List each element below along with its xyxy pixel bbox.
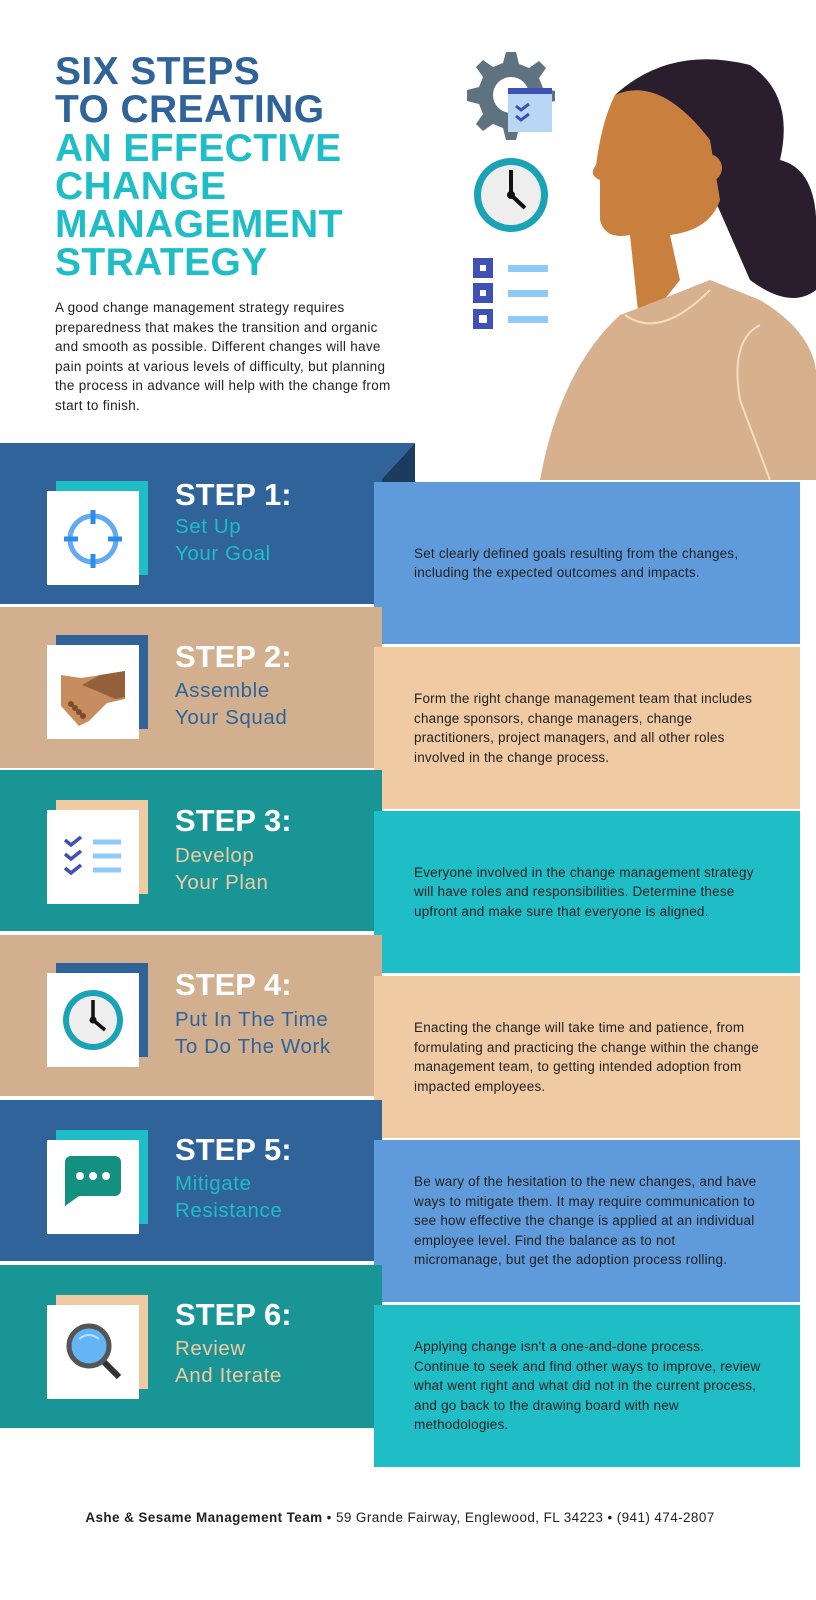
subtitle: To Do The Work: [175, 1035, 331, 1058]
subtitle: And Iterate: [175, 1364, 282, 1387]
heading: step 2: STEP 2:: [175, 639, 292, 674]
text: step 3: [374, 811, 800, 973]
footer: Ashe & Sesame Management Team • 59 Grande Fairway, Englewood, FL 34223 • (941) 474-2807: [85, 1510, 715, 1525]
subtitle: Assemble: [175, 679, 270, 702]
text: step 2: Form the right change management team that includes change sponsors, change managers, change practitioners, project managers, and all other roles involved in the change process.: [414, 691, 752, 764]
text: step 1: [374, 482, 800, 644]
icon: target: [47, 481, 148, 585]
heading: step 1: STEP 1:: [175, 477, 292, 512]
icon: clock: [474, 158, 548, 232]
title: [55, 50, 343, 284]
subtitle: [175, 844, 269, 894]
panel: step 2: [0, 607, 382, 768]
illustration: woman and icons: [467, 52, 816, 480]
title: MANAGEMENT: [55, 203, 343, 246]
text: step 1: Set clearly defined goals resulting from the changes, including the expected outcomes and impacts.: [414, 546, 738, 580]
subtitle: Review: [175, 1337, 246, 1360]
text: step 3: Everyone involved in the change management strategy will have roles and responsibilities. Determine these upfront and make sure that everyone is aligned.: [414, 865, 754, 919]
icon: checklist: [47, 800, 148, 904]
heading: step 4: STEP 4:: [175, 967, 292, 1002]
subtitle: [175, 679, 287, 729]
title: TO CREATING: [55, 88, 324, 131]
text: step 4: [374, 976, 800, 1138]
heading: step 6: STEP 6:: [175, 1297, 292, 1332]
text: step 2: [374, 647, 800, 809]
text: step 6: Applying change isn't a one-and-done process. Continue to seek and find other ways to improve, review what went right and what did not in the current process, and go back to the drawing board with new methodologies.: [414, 1339, 760, 1432]
text: step 5: Be wary of the hesitation to the new changes, and have ways to mitigate them. It may require communication to see how effective the change is applied at an individual employee level. Find the balance as to not micromanage, but get the adoption process rolling.: [414, 1174, 757, 1267]
icon: clock: [47, 963, 148, 1067]
icon: gear with checklist: [467, 52, 555, 140]
heading: step 5: STEP 5:: [175, 1132, 292, 1167]
panel: step 5: [0, 1100, 382, 1261]
icon: chat bubble: [47, 1130, 148, 1234]
panel: step 6: [0, 1265, 382, 1428]
text: step 5: [374, 1140, 800, 1302]
title: STRATEGY: [55, 241, 268, 284]
subtitle: Your Goal: [175, 542, 271, 565]
text: step 6: [374, 1305, 800, 1467]
subtitle: [175, 1337, 282, 1387]
panel: step 4: [0, 935, 382, 1096]
title: CHANGE: [55, 165, 226, 208]
panel: step 1: [0, 443, 382, 604]
title: AN EFFECTIVE: [55, 127, 341, 170]
subtitle: Develop: [175, 844, 254, 867]
subtitle: Your Plan: [175, 871, 269, 894]
heading: step 3: STEP 3:: [175, 803, 292, 838]
subtitle: [175, 1172, 282, 1222]
icon: magnifier: [47, 1295, 148, 1399]
icon: handshake: [47, 635, 148, 739]
icon: checklist: [473, 258, 548, 329]
subtitle: Your Squad: [175, 706, 287, 729]
subtitle: Put In The Time: [175, 1008, 328, 1031]
step 1 fold triangle: [382, 443, 415, 482]
woman: [540, 59, 816, 480]
intro text: A good change management strategy requires preparedness that makes the transition and organic and smooth as possible. Different changes will have pain points at various levels of difficulty, but planning the process in advance will help with the change from start to finish.: [55, 300, 391, 412]
subtitle: Resistance: [175, 1199, 282, 1222]
subtitle: [175, 515, 271, 565]
title: SIX STEPS: [55, 50, 260, 93]
panel: step 3: [0, 770, 382, 931]
subtitle: Mitigate: [175, 1172, 252, 1195]
subtitle: Set Up: [175, 515, 241, 538]
text: step 4: Enacting the change will take time and patience, from formulating and practicing the change within the change management team, to getting intended adoption from impacted employees.: [414, 1020, 759, 1094]
subtitle: [175, 1008, 331, 1058]
